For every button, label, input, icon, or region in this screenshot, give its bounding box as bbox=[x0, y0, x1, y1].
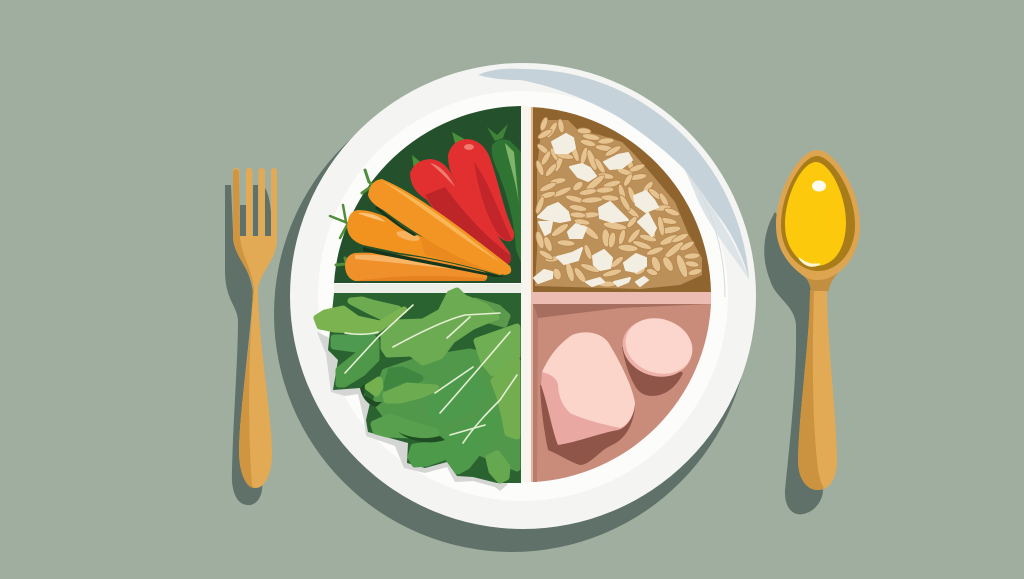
oil highlight bbox=[812, 180, 826, 192]
spoon handle bbox=[798, 290, 837, 490]
leaf mid mass bbox=[376, 352, 517, 468]
spoon bbox=[764, 150, 860, 514]
leaf top-left bbox=[317, 309, 404, 331]
oat flakes bbox=[534, 134, 658, 286]
small meat top face bbox=[618, 310, 700, 382]
leaf left bbox=[339, 341, 376, 384]
small meat edge bbox=[615, 311, 699, 385]
olive oil bbox=[785, 162, 846, 266]
carrot middle bbox=[330, 205, 510, 275]
rim fine line bbox=[685, 170, 725, 297]
leaf veins bbox=[345, 305, 517, 443]
carrot lower divider bbox=[334, 284, 521, 293]
protein edge tint bbox=[531, 304, 533, 482]
leaf bottom right bbox=[489, 454, 507, 480]
grain edge tint bbox=[531, 107, 533, 292]
vegetable background bbox=[334, 106, 521, 283]
leaf mass base bbox=[328, 293, 521, 483]
leaf right bbox=[494, 361, 517, 436]
leaf bottom bbox=[411, 411, 498, 471]
grains bbox=[534, 116, 703, 287]
rim streak bbox=[685, 170, 749, 280]
leaf small bbox=[368, 380, 380, 393]
leaf center right bbox=[431, 371, 483, 423]
dark gap lower bbox=[398, 432, 445, 442]
leaf upper right back bbox=[475, 301, 507, 324]
top shading bbox=[533, 304, 711, 318]
carrot upper bbox=[362, 170, 511, 275]
greens top background bbox=[334, 293, 521, 323]
fork bbox=[225, 168, 277, 505]
fork head and handle bbox=[233, 236, 277, 488]
plate inner well bbox=[318, 91, 728, 501]
rim reflection bbox=[478, 69, 749, 280]
spoon bowl bbox=[776, 150, 860, 291]
leaves bbox=[317, 291, 517, 480]
green pepper bbox=[487, 124, 521, 262]
fork tines bbox=[233, 168, 277, 240]
vegetables quadrant: carrots and peppers bbox=[330, 106, 521, 293]
grain pile base bbox=[535, 120, 702, 289]
oil lower highlight bbox=[799, 258, 820, 266]
large meat bbox=[541, 332, 635, 445]
grains quadrant bbox=[531, 107, 711, 292]
leaf right upper bbox=[477, 327, 517, 373]
red pepper left bbox=[410, 155, 511, 264]
leaf lower left bbox=[374, 417, 436, 436]
plate rim bbox=[290, 63, 756, 529]
leaf left dark bbox=[334, 338, 373, 349]
red pepper right bbox=[448, 132, 514, 241]
large meat shadow bbox=[540, 380, 635, 465]
spoon handle shaded side bbox=[798, 290, 824, 490]
large meat top face bbox=[542, 332, 635, 428]
protein divider band bbox=[531, 292, 711, 304]
leafy greens quadrant bbox=[317, 291, 521, 491]
protein background bbox=[533, 304, 711, 482]
plate shadow bbox=[274, 76, 750, 552]
dark gap left bbox=[360, 384, 382, 407]
carrot lower bbox=[336, 253, 487, 281]
plate bbox=[290, 63, 756, 529]
vertical divider bbox=[521, 106, 531, 482]
spoon inner rim bbox=[781, 156, 855, 271]
leaf shadow bbox=[317, 332, 508, 491]
spoon neck band bbox=[805, 273, 838, 291]
fork shaded side bbox=[233, 169, 254, 488]
spoon shadow bbox=[764, 212, 823, 514]
grain background bbox=[531, 107, 711, 292]
protein quadrant bbox=[531, 292, 711, 482]
leaf center dark bbox=[386, 370, 420, 388]
leaf center light bbox=[386, 386, 436, 400]
small meat shadow bbox=[622, 345, 683, 396]
dark gap below carrot upper bbox=[375, 206, 417, 236]
fork shadow bbox=[225, 185, 272, 505]
leaf big top bbox=[384, 291, 496, 362]
leaf upper back bbox=[351, 300, 398, 318]
left shading bbox=[533, 304, 538, 482]
dark gap below carrot middle bbox=[363, 247, 505, 277]
